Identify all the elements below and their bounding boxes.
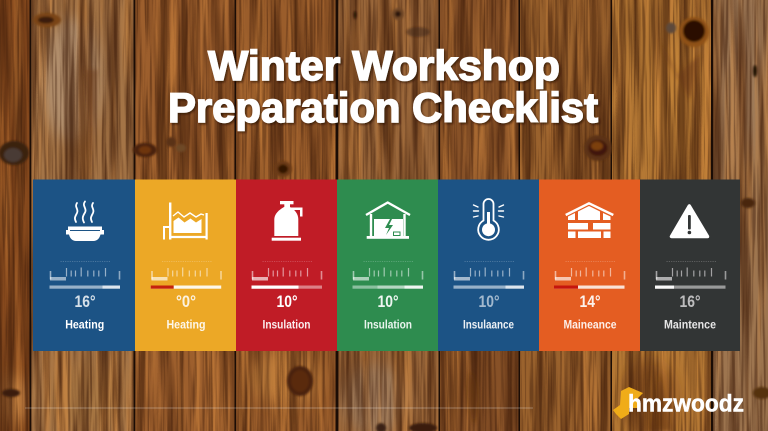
label: Maintence	[664, 320, 716, 332]
gauge	[655, 262, 726, 289]
gauge	[454, 262, 524, 289]
title: Preparation Checklist	[168, 84, 598, 131]
value: 14°	[580, 292, 601, 311]
panel: insulation red	[236, 180, 337, 351]
panel: insulance blue	[438, 180, 539, 351]
panel: heating blue	[33, 180, 135, 351]
gauge	[352, 262, 423, 289]
icon: logo house	[613, 387, 643, 419]
value: 10°	[276, 292, 298, 311]
label: Maineance	[564, 320, 616, 332]
faint horizontal line	[25, 408, 533, 409]
label: Heating	[65, 320, 104, 332]
title: Winter Workshop	[208, 42, 560, 89]
icon: steaming bowl	[66, 202, 104, 241]
value: °0°	[176, 292, 196, 311]
gauge	[50, 262, 120, 289]
panel: heating yellow	[135, 180, 236, 351]
icon: thermometer	[474, 199, 504, 240]
label: Insulation	[262, 320, 310, 332]
title	[168, 42, 598, 131]
panel: insulation green	[337, 180, 438, 351]
label: Insulation	[364, 320, 412, 332]
icon: warning triangle	[672, 206, 708, 236]
value: 16°	[680, 292, 701, 311]
gauge	[252, 262, 322, 289]
logo: hmzwoodz: hmzwoodz	[628, 390, 744, 418]
icon: propane bottle	[272, 201, 302, 241]
icon: garage with bolt	[366, 202, 410, 239]
label: Insulaance	[463, 320, 514, 332]
panel: maineance orange	[539, 180, 640, 351]
icon: brick house	[566, 203, 613, 238]
label: Heating	[166, 320, 206, 332]
gauge	[554, 262, 624, 289]
panel: maintence dark	[640, 180, 740, 351]
value: 16°	[74, 292, 96, 311]
value: 10°	[378, 292, 399, 311]
gauge	[151, 262, 221, 289]
icon: furnace chart	[164, 202, 208, 240]
value: 10°	[478, 292, 500, 311]
